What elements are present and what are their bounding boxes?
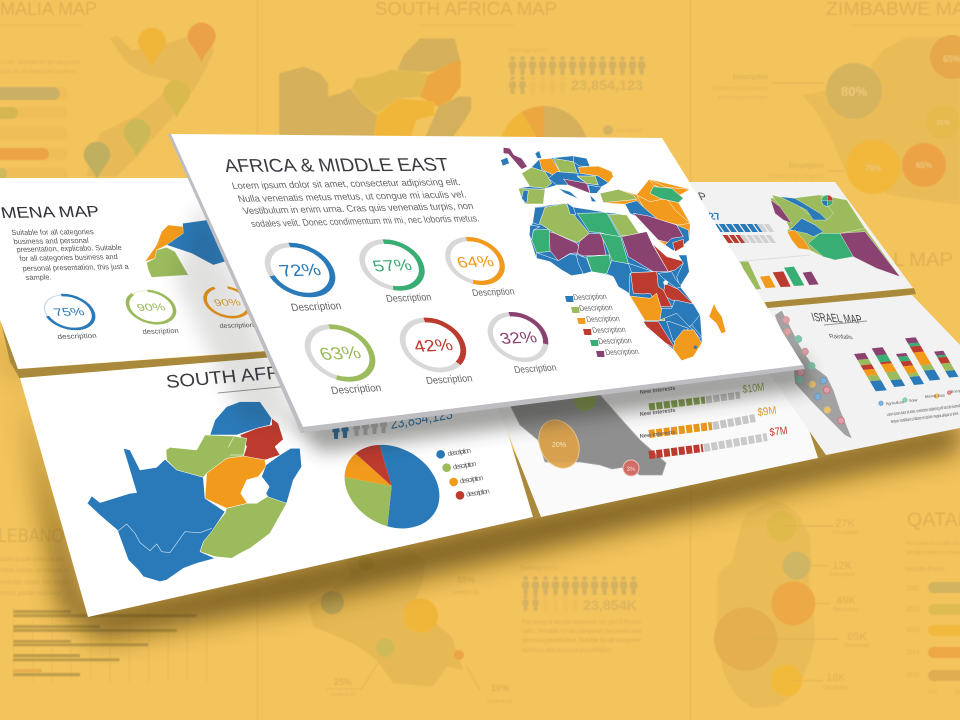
legend labels and note: Solar [909,398,919,403]
chart label: rainfalls: Rainfalls [828,333,854,341]
legend labels and note: Mining [925,394,936,399]
ghost text: Lebanon description: netus metus, ut congue mi [0,568,70,574]
label: 63% ring: Description [330,382,383,397]
label: 90% orange ring: description [219,322,255,330]
map: Morocco, Algeria region [145,220,225,277]
pie legend [436,447,490,500]
map markers [783,317,844,424]
shadow: under slide panels [0,310,960,640]
ghost labels: Zimbabwe: Description [733,74,768,81]
ghost labels: Iraq: content 03 [453,590,479,596]
chart: 90% green ring: 90% [135,301,168,313]
ghost labels: Zimbabwe: Description [789,163,824,170]
ghost population number: 23,854,123 [571,77,643,93]
chart: 75% ring: 75% [51,306,87,318]
ghost text: Somalia description [0,60,80,75]
ghost map: Somalia [84,23,216,180]
legend: map colours: Description [604,347,639,357]
ghost pie chart: description [616,128,643,134]
heading: MENA map: MENA MAP [0,204,101,222]
ghost text: demographics description: personal presentation. Suitable for all categories [522,638,641,644]
ghost text: demographics description: For every 6 emails received, we get 3 Phone [522,620,642,626]
ghost labels: Qatar: Description [829,572,855,578]
ghost text: Lebanon description: metus portad vulputate [0,591,62,597]
ghost labels: Qatar: 18K [826,672,846,684]
ghost map: South Africa [279,38,471,140]
pictogram row: $9M: $9M [757,405,777,419]
panel background [0,178,292,369]
panel: Libya map [670,182,913,302]
heading: South Africa: SOUTH AFRICA MAP [165,355,364,392]
ghost bubbles: Zimbabwe: 75% [865,164,881,173]
chart: 42% ring: 42% [411,336,455,356]
ghost growth pills: 2013 [906,628,920,634]
pie legend: description [447,447,472,458]
panel background [171,134,803,427]
chart: 72% ring [259,244,341,296]
label: 42% ring: Description [425,373,474,387]
chart: 90% orange ring: 90% [212,297,243,308]
panel: Israel map [768,295,960,455]
label: 75% ring: description [57,333,97,341]
ghost slide: Iraq map [277,548,513,705]
bubble: green [574,389,596,411]
map: grey region [510,395,666,475]
pictogram row: $10M [640,381,765,407]
label: 90% green ring: description [142,328,179,336]
ghost slide: demographics [520,565,642,654]
legend labels and note [886,389,960,424]
ghost bubbles: Zimbabwe: 80% [841,84,867,99]
bubble: 20% [531,413,587,475]
ghost map: Qatar [714,500,838,708]
panel: grey map with pictograms [487,340,818,517]
ghost text: Somalia description: c Lets. Suitable for all categories [0,60,80,66]
map: Libya [771,195,900,277]
ghost labels: Zimbabwe [712,74,845,180]
chart: 64% ring [441,238,509,284]
ghost labels: Qatar: 12K [832,560,852,572]
ghost labels: Qatar [823,518,870,691]
legend: map colours: Description [597,336,632,346]
ghost labels: Iraq: 25% [334,677,352,687]
ghost text: Lebanon description: orem ipsum dolor sit am [0,557,64,563]
pictogram rows [715,228,779,239]
chart: 64% ring: 64% [454,253,496,271]
label: 64% ring: Description [471,286,516,299]
ghost growth pills: 2011 [906,586,920,592]
text: MENA description: personal presentation, this just a [22,262,130,273]
pictogram and population number: 23,854,123 [390,406,453,433]
ghost bubbles: Zimbabwe: 35% [936,120,951,127]
ghost bubbles: Zimbabwe [826,35,960,194]
pictogram row: $9M [640,405,777,434]
ghost demographic label: Demographic: [508,47,549,54]
ghost slide: Lebanon [0,526,207,682]
pie legend: description [465,487,490,499]
ghost labels: Zimbabwe: business presentation. [718,95,768,101]
ghost labels: Qatar: 27K [835,518,855,530]
stacked bar chart [854,337,958,391]
ghost labels: Qatar: Description [833,607,859,613]
text: MENA description: presentation, explicabo. Suitable [16,243,122,254]
label: 72% ring: Description [290,300,343,314]
heading: Africa & Middle East: AFRICA & MIDDLE EAST [222,154,452,176]
ghost text: Qatar description: Growth Rates [905,566,945,573]
legend: map colours: Description [572,292,607,302]
ghost labels: Zimbabwe: Suitable for all categories [712,86,768,92]
pictogram and population number [332,406,453,439]
ghost text: demographics description [522,620,642,654]
ghost text: demographics description: business and personal presentation. [522,648,612,654]
label: 57% ring: Description [385,292,433,305]
ghost labels: Qatar: Description [823,685,849,691]
ghost labels: Iraq [277,575,513,705]
ghost bar chart: Lebanon [13,607,207,682]
pie legend: description [452,460,477,471]
ghost slide: South Africa map [279,0,645,194]
panel background [768,295,960,455]
ghost people pictogram [509,56,645,94]
ghost map: Iraq [308,548,480,690]
text: MENA description: for all categories business and [19,252,118,263]
text: lorem paragraph: Lorem ipsum dolor sit amet, consectetur adipiscing elit. [231,177,462,192]
chart: 57% ring [355,240,429,290]
gold gaps between panels [0,288,916,520]
text: MENA description: sample. [25,273,52,282]
text: lorem paragraph: sodales velit. Donec condimentum mi mi, nec lobortis metus. [250,213,481,230]
pictogram row: $7M: New Interests [640,430,676,440]
chart: 90% orange ring [192,282,262,322]
ghost text: Qatar description [905,541,960,573]
ghost growth pills: 0% [928,690,937,696]
chart: 75% ring [38,294,100,330]
ghost text: Qatar description: For every 6 emails rec [906,541,960,547]
ghost growth pills [906,582,960,696]
ghost labels: Iraq: content 01 [487,699,513,705]
chart: 90% green ring [117,287,185,327]
ghost bubbles: Zimbabwe: 65% [916,161,932,170]
heading: Libya map: MAP [680,190,709,203]
shadow: main slide bottom edge [290,358,812,452]
panel: Africa & Middle East [168,134,805,433]
ghost map: Zimbabwe [802,37,960,205]
ghost title: Lebanon: LEBANO [0,526,64,547]
ghost map pins [84,23,216,180]
ghost text: Qatar description: all categories business [906,550,960,556]
shadow: main slide left edge [175,200,303,428]
ghost text: Lebanon description [0,557,70,597]
map: Africa and Middle East countries [501,147,726,361]
pictogram row: $10M: New Interests [640,386,676,396]
bubble: 20%: 20% [552,442,566,449]
pictogram row: $7M: $7M [769,425,788,439]
panel background [20,340,533,617]
ghost text: Lebanon description: enenatis turpis, non sodal [0,580,68,586]
chart: 32% ring: 32% [497,328,539,348]
ghost labels: Qatar: Description [832,530,858,536]
panel edge [168,134,805,433]
ghost text: Somalia description: table for all categories business [0,69,77,75]
ghost labels: Iraq: 55% [457,575,475,585]
ghost growth pills: 2012 [906,607,920,613]
ghost demographic label: Demographic: [520,565,561,572]
ghost labels: Iraq: content 01 [330,692,356,698]
ghost text: demographics description: calls. Suitable for all categories business and [522,629,641,635]
ghost progress bars [0,87,68,179]
chart: 63% ring [299,325,381,381]
label: 32% ring: Description [513,363,558,376]
text: MENA description: Suitable for all categories [11,227,95,237]
legend: map colours [565,292,639,357]
text: MENA description: business and personal [13,236,90,246]
legend labels and note: Agriculture [886,400,904,406]
ghost slide: Qatar map [714,500,960,708]
panel: MENA map [0,178,292,369]
pictogram row: $9M: New Interests [640,408,676,418]
heading: Israel map: ISRAEL MAP [810,310,864,326]
ghost slide: Zimbabwe map [712,0,960,205]
legend: map colours: Description [591,325,626,335]
text: lorem paragraph [231,177,481,230]
text: lorem paragraph: Nulla venenatis metus metus, ut congue mi iaculis vel. [237,190,468,205]
number: population: 327 [701,210,723,223]
ghost slide: Somalia map [0,0,216,180]
bar chart [740,262,819,290]
chart: 42% ring [395,319,471,371]
pie legend: description [459,474,484,485]
chart: 72% ring: 72% [277,261,324,281]
ghost labels: Zimbabwe: Suitable for all categories [768,174,824,180]
chart legend dots [879,391,951,406]
ghost title: Israel map: L MAP [893,250,953,271]
ghost labels: Iraq: content 02 [277,579,303,585]
ghost growth pills: 2014 [906,650,920,656]
panel background [670,182,913,302]
ghost population number: 23,854K [583,597,637,613]
map: Israel [775,311,958,438]
ghost labels: Iraq: 10% [491,683,509,693]
chart: 57% ring: 57% [370,256,415,275]
legend: map colours: Description [578,303,613,313]
bubble: red: 3% [627,467,636,473]
ghost pie chart [500,106,643,194]
bubble: red [623,460,639,476]
ghost labels: Qatar: 65K [847,631,867,643]
ghost people pictogram [522,576,637,611]
panel background [487,340,818,517]
legend: map colours: Description [585,314,620,324]
pictogram row: $7M [640,425,788,455]
text: lorem paragraph: Vestibulum in enim urna. Cras quis venenatis turpis, non [242,201,475,217]
pictogram row: $10M: $10M [742,381,765,396]
chart: 32% ring [484,313,552,361]
chart: 63% ring: 63% [317,344,364,364]
ghost labels: Qatar: 49K [836,595,856,607]
text: MENA description [11,227,130,282]
pie chart [344,444,490,528]
ghost labels: Qatar: Description [844,643,870,649]
legend labels and note: Gas [938,393,945,398]
map: South Africa provinces [87,402,302,582]
panel: South Africa map [20,340,533,617]
ghost growth pills: 2015 [906,673,920,679]
